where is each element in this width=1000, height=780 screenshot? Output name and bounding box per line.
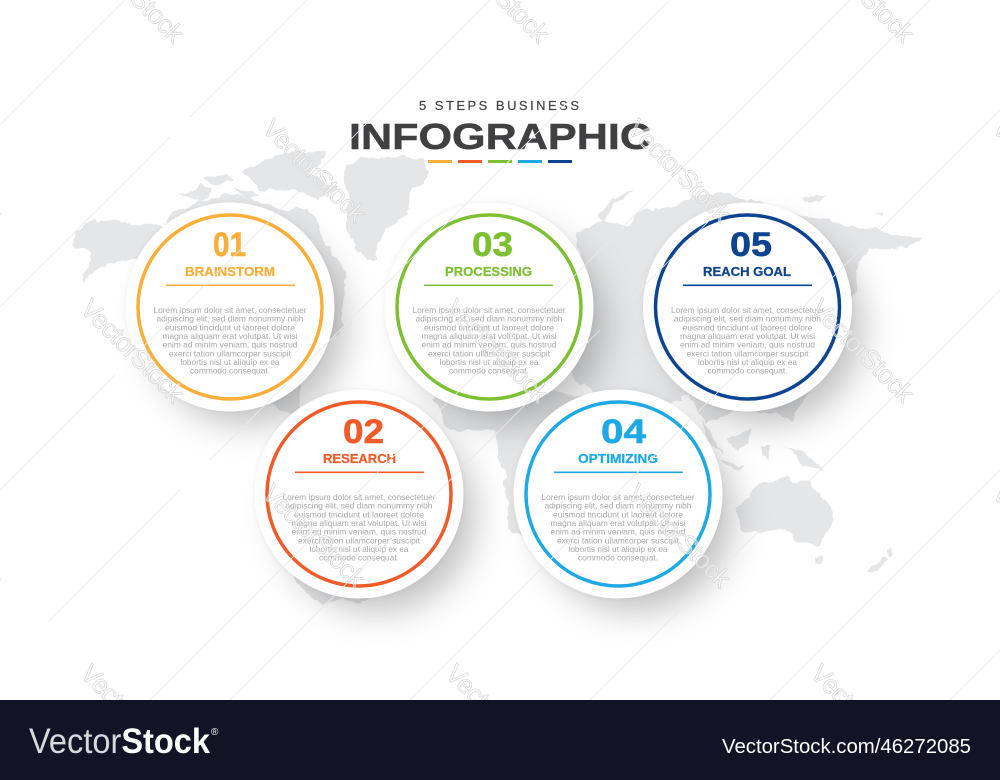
step 03 processing: commodo consequat. <box>449 367 529 376</box>
step 04 optimizing: commodo consequat. <box>578 554 658 563</box>
map: new zealand and tasmania <box>815 545 892 574</box>
map: eurasia <box>560 195 922 425</box>
watermarks: VectorStock <box>257 113 373 229</box>
map: australia <box>738 475 833 547</box>
watermarks: VectorStock <box>622 113 738 229</box>
step 03 processing: Lorem ipsum dolor sit amet, consectetuer <box>412 306 566 315</box>
footer logo: VectorStock <box>29 722 210 761</box>
step 04 optimizing: euismod tincidunt ut laoreet dolore <box>553 510 683 519</box>
map: greenland <box>343 155 428 262</box>
step 04 optimizing: OPTIMIZING <box>578 451 658 466</box>
step 05 reach goal: Lorem ipsum dolor sit amet, consectetuer <box>671 306 824 315</box>
map: south america <box>290 560 400 603</box>
step 04 optimizing: adipiscing elit, sed diam nonummy nibh <box>544 502 692 511</box>
step 05 reach goal: euismod tincidunt ut laoreet dolore <box>682 323 813 332</box>
map: north america <box>73 195 345 420</box>
step 04 optimizing: enim ad minim veniam, quis nostrud <box>550 528 686 537</box>
watermarks: VectorStock <box>440 658 556 774</box>
watermarks: VectorStock <box>805 658 921 774</box>
step 03 processing: exerci tation ullamcorper suscipit <box>428 349 551 358</box>
step 05 reach goal: commodo consequat. <box>708 367 788 376</box>
map: arctic islands <box>180 150 340 200</box>
heading <box>349 98 651 163</box>
step 03 processing <box>384 202 594 412</box>
step 03 processing: 03 <box>472 226 513 264</box>
step 03 processing: PROCESSING <box>445 264 532 279</box>
step 05 reach goal: lobortis nisl ut aliquip ex ea <box>698 358 797 367</box>
step 02 research: RESEARCH <box>323 451 396 466</box>
step 04 optimizing: lobortis nisl ut aliquip ex ea <box>568 545 668 554</box>
step 02 research: commodo consequat. <box>319 554 399 563</box>
step 05 reach goal <box>642 202 852 412</box>
watermarks: VectorStock <box>75 658 191 774</box>
step 04 optimizing: 04 <box>601 413 646 451</box>
step 03 processing: lobortis nisl ut aliquip ex ea <box>440 358 539 367</box>
watermarks: VectorStock <box>257 478 373 594</box>
map: africa <box>432 385 610 537</box>
subtitle: 5 STEPS BUSINESS <box>419 98 579 113</box>
step 05 reach goal: exerci tation ullamcorper suscipit <box>686 349 809 358</box>
step 02 research: magna aliquam erat volutpat. Ut wisi <box>292 519 427 528</box>
footer url: VectorStock.com/46272085 <box>722 736 971 758</box>
watermarks: VectorStock <box>440 293 556 409</box>
step 01 brainstorm: adipiscing elit, sed diam nonummy nibh <box>156 315 304 324</box>
step 03 processing: magna aliquam erat volutpat. Ut wisi <box>422 332 557 341</box>
step 05 reach goal: magna aliquam erat volutpat. Ut wisi <box>680 332 815 341</box>
step 05 reach goal: enim ad minim veniam, quis nostrud <box>680 341 815 350</box>
step 01 brainstorm: euismod tincidunt ut laoreet dolore <box>165 323 295 332</box>
step 02 research: exerci tation ullamcorper suscipit <box>298 536 421 545</box>
watermarks: VectorStock <box>805 293 921 409</box>
world map background <box>73 150 922 603</box>
step 05 reach goal: REACH GOAL <box>703 264 791 279</box>
step 04 optimizing: magna aliquam erat volutpat. Ut wisi <box>550 519 686 528</box>
step 04 optimizing <box>513 389 723 599</box>
step 01 brainstorm: Lorem ipsum dolor sit amet, consectetuer <box>154 306 307 315</box>
step 02 research: adipiscing elit, sed diam nonummy nibh <box>286 502 433 511</box>
step 02 research: euismod tincidunt ut laoreet dolore <box>294 510 424 519</box>
step 01 brainstorm <box>125 202 335 412</box>
step 02 research <box>254 389 464 599</box>
footer bar <box>0 700 1000 780</box>
step 03 processing: enim ad minim veniam, quis nostrud <box>422 341 557 350</box>
step 04 optimizing: exerci tation ullamcorper suscipit <box>557 536 680 545</box>
step 02 research: 02 <box>343 413 384 451</box>
circle shadows <box>150 229 863 612</box>
step 05 reach goal: adipiscing elit, sed diam nonummy nibh <box>674 315 821 324</box>
step 01 brainstorm: commodo consequat. <box>190 367 270 376</box>
step 04 optimizing: Lorem ipsum dolor sit amet, consectetuer <box>542 493 695 502</box>
step 02 research: lobortis nisl ut aliquip ex ea <box>310 545 409 554</box>
main title: INFOGRAPHIC <box>349 116 651 157</box>
step 02 research: Lorem ipsum dolor sit amet, consectetuer <box>282 493 436 502</box>
step 01 brainstorm: BRAINSTORM <box>185 264 275 279</box>
watermarks: VectorStock <box>622 478 738 594</box>
step 01 brainstorm: enim ad minim veniam, quis nostrud <box>162 341 298 350</box>
step 03 processing: adipiscing elit, sed diam nonummy nibh <box>416 315 563 324</box>
step 01 brainstorm: lobortis nisl ut aliquip ex ea <box>180 358 280 367</box>
step 02 research: enim ad minim veniam, quis nostrud <box>292 528 427 537</box>
registered mark: ® <box>211 727 219 738</box>
map: south east asia islands <box>700 420 825 470</box>
step 03 processing: euismod tincidunt ut laoreet dolore <box>424 323 554 332</box>
map: arctic russia islands <box>597 190 885 225</box>
step 05 reach goal: 05 <box>730 226 772 264</box>
step 01 brainstorm: 01 <box>213 226 246 264</box>
colour underline <box>428 160 572 163</box>
step 01 brainstorm: magna aliquam erat volutpat. Ut wisi <box>162 332 298 341</box>
watermarks: VectorStock <box>75 293 191 409</box>
step 01 brainstorm: exerci tation ullamcorper suscipit <box>169 349 292 358</box>
